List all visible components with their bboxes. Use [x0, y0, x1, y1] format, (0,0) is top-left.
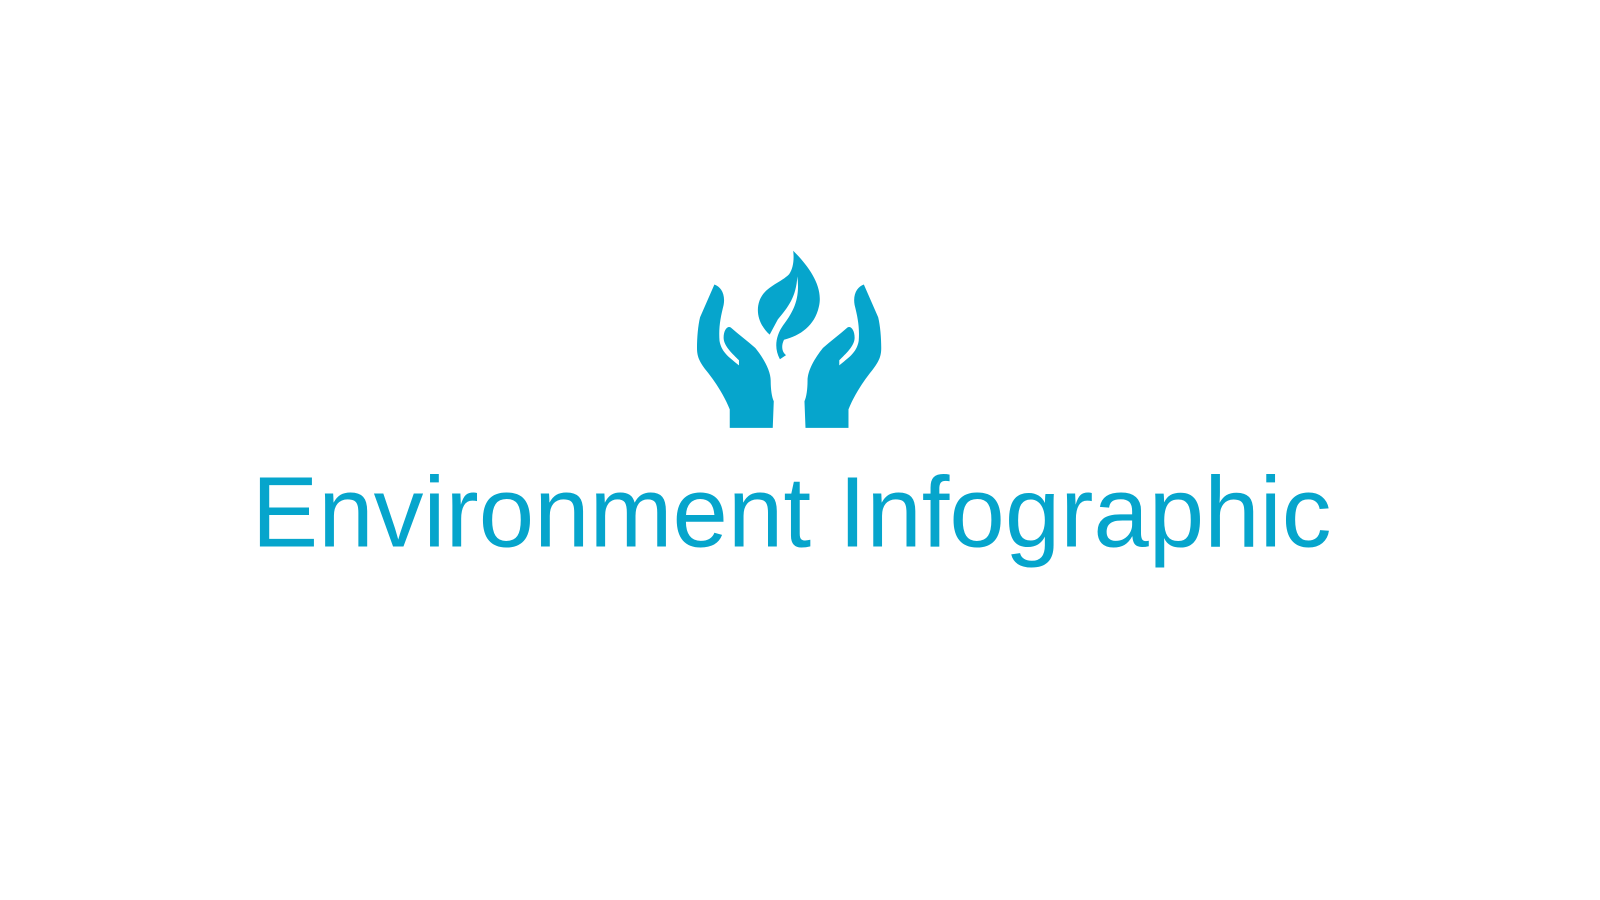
title: Environment Infographic: [252, 457, 1332, 569]
icon: right hand: [804, 285, 881, 428]
icon: left hand: [697, 285, 774, 428]
graphic: icon and title: [252, 251, 1332, 569]
icon: leaf: [758, 251, 820, 359]
icon: hands holding leaf: [697, 251, 881, 428]
